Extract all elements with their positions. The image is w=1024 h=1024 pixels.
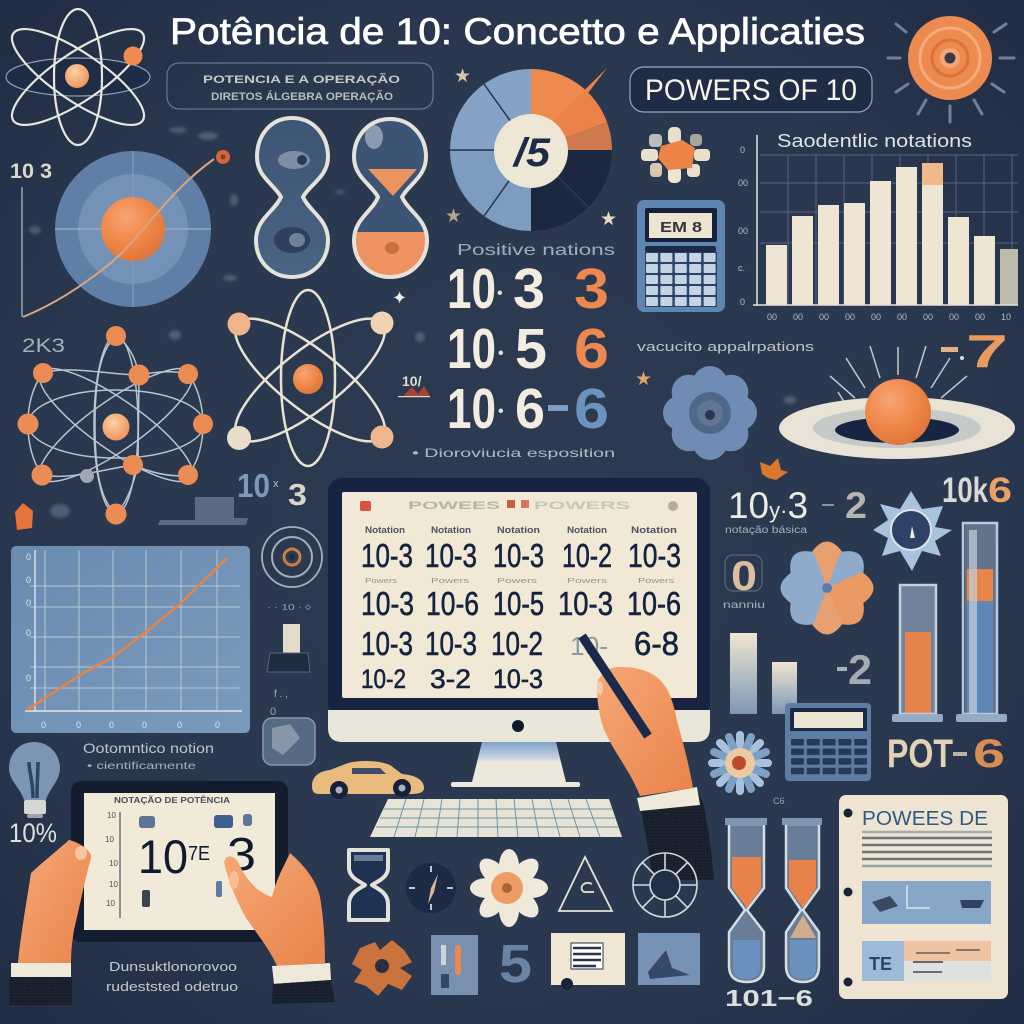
numbers: positive powers list: 5: [515, 317, 547, 381]
icon: pinwheel: [780, 542, 874, 634]
chart: scientific notation bars: 0: [740, 297, 745, 307]
table of powers: 10-6: [627, 585, 681, 622]
text: ten y 3 with caption: 2: [845, 485, 867, 526]
icon: keyboard: [370, 799, 622, 837]
icon: stars: ★: [445, 206, 462, 227]
icon: orange splat cluster: [352, 940, 412, 996]
icon: calculator: EM 8: [660, 219, 702, 236]
icon: clock: [406, 863, 456, 913]
tablet with hands: 10: [138, 830, 188, 883]
table of powers: [361, 537, 681, 694]
monitor stand: [472, 742, 566, 782]
monitor with table: [328, 478, 710, 787]
table of powers: 10-3: [558, 585, 613, 622]
monitor with table: Powers: [431, 578, 470, 585]
icon: sun top right: [888, 16, 1014, 122]
numbers: positive powers list: 10: [447, 257, 496, 321]
monitor with table: Notation: [497, 525, 540, 535]
chart: scientific notation bars: [738, 131, 1018, 322]
icon: tall test tube: [956, 523, 1007, 722]
icon: jar: [263, 718, 315, 765]
chart: scientific notation bars: 00: [738, 178, 748, 188]
text: positive notations label: Positive nations: [457, 242, 615, 259]
icon: empty hourglass: [256, 118, 328, 277]
icon: blue calculator: [785, 703, 871, 781]
chart: small fading bars: [730, 633, 797, 714]
monitor with table: Powers: [567, 578, 608, 585]
text: tablet caption: Dunsuktlonorovoo: [109, 959, 237, 974]
icon: note card: [551, 933, 625, 990]
text: ten y 3 with caption: 10y·3: [728, 485, 808, 526]
panel: document: TE: [869, 954, 892, 974]
subtitle panel: POTENCIA E A OPERAÇÃO: [203, 73, 401, 86]
icon: twin sand timers: [725, 796, 822, 982]
chart: growth line panel: 0: [142, 720, 147, 730]
text: notation caption: Ootomntico notion: [83, 740, 214, 756]
title: Potência de 10: Concetto e Applicaties: [170, 11, 865, 52]
numbers: positive powers list: 6: [515, 377, 545, 441]
numbers: positive powers list: 10: [447, 377, 496, 441]
panel: document: POWEES DE: [862, 808, 988, 830]
chart: scientific notation bars: c.: [738, 263, 745, 273]
chart: orbit disc with curve: 10 3: [10, 160, 52, 183]
numbers: positive powers list: •: [497, 285, 503, 302]
icon: atom top left: [0, 9, 156, 145]
text: minus seven: 7: [966, 325, 1008, 377]
monitor with table: Notation: [431, 525, 471, 535]
chart: scientific notation bars: 00: [767, 312, 777, 322]
tablet with hands: 10: [109, 859, 118, 868]
icon: large atom: [219, 290, 401, 466]
numbers: positive powers list: 10: [447, 317, 496, 381]
chart: scientific notation bars: 00: [897, 312, 907, 322]
chart: growth line panel: 0: [41, 720, 46, 730]
number: five: 5: [499, 934, 532, 994]
icon: small gear flower: [641, 127, 710, 183]
chart: scientific notation bars: 00: [871, 312, 881, 322]
icon: hand with pen: [582, 636, 714, 880]
table of powers: 10-3: [425, 625, 477, 662]
chart: scientific notation bars: 00: [738, 226, 748, 236]
icon: small card: [431, 935, 478, 995]
table of powers: 10-2: [562, 537, 612, 574]
chart: growth line panel: 0: [109, 720, 114, 730]
heading pill: powers of 10: [630, 67, 872, 112]
text: notation caption: [83, 740, 214, 772]
icon: planet with rings: [779, 346, 1015, 459]
icon: calculator: [637, 200, 725, 312]
icon: twin sand timers: C6: [773, 796, 785, 806]
table of powers: 10-3: [493, 664, 543, 694]
chart: pie dial: /5: [512, 131, 551, 175]
numbers: positive powers list: 6: [574, 377, 609, 441]
icon: target ring: [262, 527, 322, 587]
table of powers: 10-: [570, 631, 608, 661]
numbers: positive powers list: 3: [513, 257, 545, 321]
icon: stars: ★: [600, 209, 617, 230]
numbers: positive powers list: •: [498, 345, 504, 362]
text: bulb power label: 10%: [9, 818, 57, 848]
tablet with hands: 10: [106, 899, 115, 908]
tablet with hands: 3: [227, 828, 256, 880]
left hand: [9, 840, 91, 1005]
chart: growth line panel: 0: [215, 720, 220, 730]
monitor with table: Powers: [497, 578, 538, 585]
monitor with table: Powers: [638, 578, 675, 585]
text: ten y 3 with caption: notação básica: [725, 525, 808, 536]
text: ten k six: 6: [988, 471, 1012, 510]
table of powers: 10-3: [628, 537, 681, 574]
chart: growth line panel: [11, 546, 250, 733]
labels: small power notes: 10: [237, 467, 270, 504]
table of powers: 3-2: [430, 664, 471, 694]
tablet with hands: 10: [105, 835, 114, 844]
labels: small power notes: x: [273, 478, 279, 490]
icon: stars: ★: [454, 66, 471, 87]
text: minus two: [837, 646, 872, 693]
table of powers: 10-3: [361, 537, 413, 574]
text: pot minus six: [887, 732, 1005, 776]
table of powers: 10-3: [361, 625, 413, 662]
numbers: positive powers list: 3: [574, 257, 609, 321]
chart: growth line panel: 0: [26, 628, 31, 638]
text: small note below ring: · · 10 · ◊: [267, 603, 311, 612]
icon: blue flower: [663, 366, 757, 460]
icon: car: [312, 761, 424, 799]
labels: small power notes: [15, 336, 430, 530]
panel: document: [839, 795, 1008, 999]
chart: scientific notation bars: 10: [1001, 312, 1011, 322]
icon: bottle: f . ,: [274, 689, 288, 700]
monitor with table: Notation: [631, 525, 677, 535]
chart: pie dial: [450, 68, 612, 231]
monitor with table: Notation: [567, 525, 607, 535]
icon: bottle: [267, 624, 310, 718]
labels: small power notes: 10/: [402, 373, 422, 389]
text: notation caption: • cientificamente: [87, 761, 197, 772]
icon: stars: [392, 66, 652, 390]
numbers: positive powers list: 6: [574, 317, 609, 381]
icon: zero badge: 0: [731, 552, 757, 599]
table of powers: 10-3: [493, 537, 544, 574]
monitor with table: POWERS: [534, 500, 630, 512]
text: minus two: 2: [848, 646, 872, 693]
tablet with hands: 10: [107, 811, 116, 820]
monitor with table: POWEES: [408, 500, 500, 512]
icon: blue gear star: [873, 491, 952, 571]
chart: scientific notation bars: 00: [975, 312, 985, 322]
chart: growth line panel: 0: [26, 673, 31, 683]
icon: zero badge: nanniu: [723, 600, 765, 611]
chart: growth line panel: 0: [26, 575, 31, 585]
icon: bottle: 0: [270, 706, 276, 718]
icon: hourglass with sand: [350, 115, 430, 280]
chart: growth line panel: 0: [76, 720, 81, 730]
chart: scientific notation bars: 0: [740, 145, 745, 155]
monitor with table: Powers: [365, 578, 398, 585]
icon: stars: ★: [635, 369, 652, 390]
chart: network atom: [18, 326, 213, 524]
text: pot minus six: POT: [887, 732, 953, 776]
text: ten y 3 with caption: [725, 485, 867, 536]
chart: scientific notation bars: 00: [949, 312, 959, 322]
chart: growth line panel: 0: [26, 552, 31, 562]
table of powers: 10-6: [426, 585, 479, 622]
icon: stars: ✦: [392, 288, 407, 308]
text: tablet caption: [106, 959, 238, 994]
table of powers: 10-3: [425, 537, 477, 574]
icon: zero badge: [723, 552, 765, 611]
heading pill: powers of 10: POWERS OF 10: [645, 74, 857, 107]
chart: scientific notation bars: Saodentlic notations: [777, 131, 972, 151]
table of powers: 10-2: [491, 625, 543, 662]
numbers: positive powers list: •: [498, 403, 504, 420]
icon: wheel: [633, 853, 697, 917]
text: caption under list: • Dioroviucia esposition: [412, 446, 615, 460]
tablet with hands: NOTAÇÃO DE POTÊNCIA: [114, 796, 230, 805]
tablet with hands: 7E: [188, 843, 210, 865]
table of powers: 10-5: [493, 585, 544, 622]
labels: small power notes: 2K3: [22, 336, 65, 357]
table of powers: 6-8: [634, 625, 679, 662]
icon: small orange splat: [760, 458, 788, 480]
icon: short test tube: [892, 585, 943, 722]
subtitle panel: DIRETOS ÁLGEBRA OPERAÇÃO: [211, 90, 393, 103]
text: tablet caption: rudeststed odetruo: [106, 979, 238, 994]
icon: white flower: [470, 849, 548, 927]
text: scientific applications: vacucito appalrpations: [637, 339, 815, 354]
tablet with hands: [9, 781, 335, 1005]
tablet with hands: 10: [109, 880, 118, 889]
chart: orbit disc with curve: [10, 150, 230, 317]
chart: scientific notation bars: 00: [923, 312, 933, 322]
icon: small hourglass: [349, 850, 388, 920]
chart: growth line panel: 0: [26, 598, 31, 608]
table of powers: 10-2: [361, 664, 406, 694]
subtitle panel: [167, 63, 433, 109]
text: pot minus six: 6: [973, 732, 1005, 776]
table of powers: 10-3: [361, 585, 414, 622]
icon: light bulb: [9, 742, 60, 818]
chart: scientific notation bars: 00: [819, 312, 829, 322]
text: ten k six: 10k: [942, 471, 988, 510]
text: minus seven: [941, 325, 1008, 377]
icon: image tile: [638, 933, 700, 985]
chart: scientific notation bars: 00: [793, 312, 803, 322]
chart: scientific notation bars: 00: [845, 312, 855, 322]
monitor with table: Notation: [365, 525, 405, 535]
numbers: positive powers list: [447, 257, 609, 441]
text: 101 minus 6: 101−6: [725, 985, 813, 1011]
icon: blue daisy: [712, 735, 768, 791]
icon: triangle: [559, 857, 612, 911]
labels: small power notes: 3: [288, 477, 307, 512]
right hand: [224, 853, 335, 1004]
chart: growth line panel: 0: [177, 720, 182, 730]
